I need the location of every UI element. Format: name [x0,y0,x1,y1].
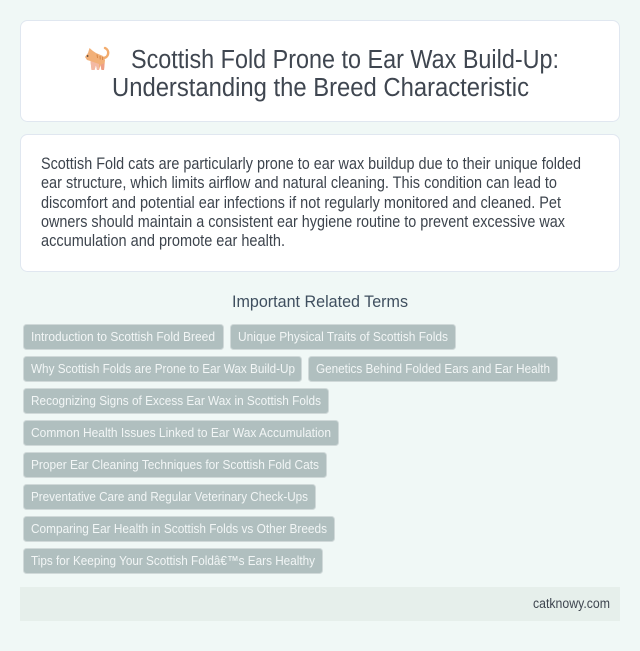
text block: description: ear structure, which limits airflow and natural cleaning. This condition can lead to [41,174,557,192]
text block: description: accumulation and promote ear health. [41,232,285,250]
text block: description: owners should maintain a consistent ear hygiene routine to prevent excessive wax [41,213,566,231]
panel: related term chips [24,324,558,574]
panel: description card [20,134,620,272]
chip: recognizing signs [24,388,328,414]
title [112,46,559,102]
chip: common health issues [24,420,338,446]
chip: introduction: Introduction to Scottish Fold Breed [31,329,215,344]
footer text: catknowy.com [533,596,610,611]
panel: title card [20,20,620,122]
chip: genetics [308,356,558,382]
chip: comparing ear health: Comparing Ear Health in Scottish Folds vs Other Breeds [31,521,327,536]
chip: introduction [24,324,224,350]
heading: important related terms: Important Related Terms [232,293,408,311]
icon: cat [85,48,108,70]
chip: cleaning techniques: Proper Ear Cleaning Techniques for Scottish Fold Cats [31,457,319,472]
chip: common health issues: Common Health Issues Linked to Ear Wax Accumulation [31,425,331,440]
chip: preventative care [24,484,316,510]
chip: physical traits [230,324,456,350]
chip: tips: Tips for Keeping Your Scottish Foldâ€™s Ears Healthy [31,553,315,568]
text block: description: discomfort and potential ear infections if not regularly monitored and cleaned. Pet [41,194,561,212]
text block: description [41,155,581,250]
chip: cleaning techniques [24,452,326,478]
chip: physical traits: Unique Physical Traits of Scottish Folds [238,329,448,344]
chip: why prone: Why Scottish Folds are Prone to Ear Wax Build-Up [31,361,295,376]
chip: comparing ear health [24,516,334,542]
chip: recognizing signs: Recognizing Signs of Excess Ear Wax in Scottish Folds [31,393,321,408]
chip: preventative care: Preventative Care and Regular Veterinary Check-Ups [31,489,308,504]
chip: genetics: Genetics Behind Folded Ears and Ear Health [316,361,550,376]
title: Scottish Fold Prone to Ear Wax Build-Up: [131,46,559,74]
chip: tips [24,548,322,574]
chip: why prone [24,356,302,382]
title: Understanding the Breed Characteristic [112,74,529,102]
panel: footer [20,587,620,621]
